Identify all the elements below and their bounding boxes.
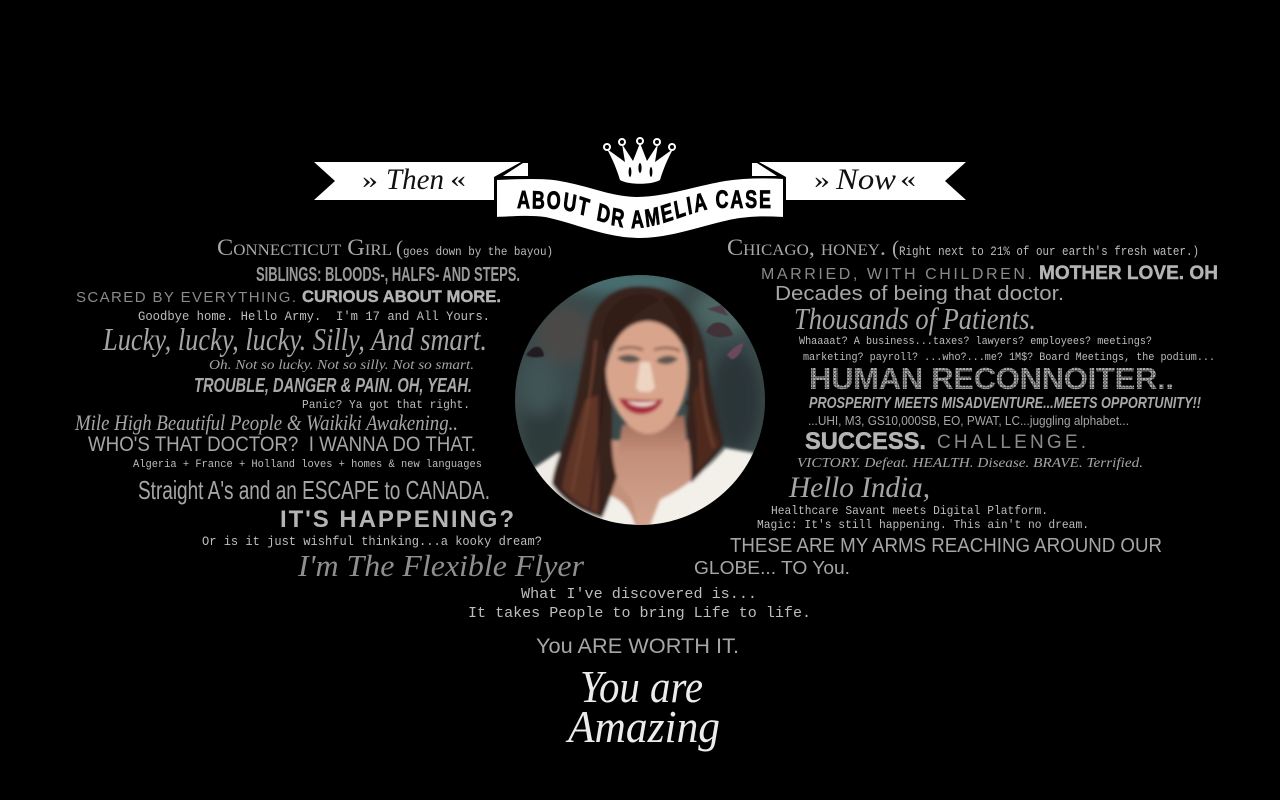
- portrait photo: [515, 270, 765, 530]
- line: These are my arms: THESE ARE MY ARMS REACHING AROUND OUR: [730, 535, 1162, 557]
- icon: crown: [604, 138, 675, 184]
- line: Victory Defeat: VICTORY. Defeat. HEALTH. Disease. BRAVE. Terrified.: [797, 456, 1143, 471]
- line: Panic: Panic? Ya got that right.: [302, 398, 470, 412]
- line: Hello India: Hello India,: [788, 471, 930, 504]
- line: Mile High: Mile High Beautiful People & Waikiki Awakening..: [74, 410, 458, 435]
- banner: Now ribbon: «: [900, 167, 916, 193]
- line: Chicago honey: Chicago, honey.: [727, 235, 886, 260]
- line: Scared by everything: SCARED BY EVERYTHING.: [76, 289, 296, 306]
- banner: Then ribbon: «: [450, 167, 466, 193]
- panel: Then column: [74, 235, 585, 583]
- leaves: [706, 323, 733, 337]
- skin base under shirt: [608, 437, 694, 525]
- line: Scared by everything: [76, 287, 501, 306]
- line: Married with children: [761, 263, 1218, 284]
- line: Or is it just: Or is it just wishful thinking...a kooky dream?: [202, 535, 542, 549]
- line: Straight A's: Straight A's and an ESCAPE to CANADA.: [138, 475, 490, 505]
- line: Chicago honey: Right next to 21% of our earth's fresh water.): [899, 244, 1199, 259]
- line: Goodbye home: Goodbye home. Hello Army. I'm 17 and All Yours.: [138, 310, 490, 324]
- line: Magic: Magic: It's still happening. This ain't no dream.: [757, 518, 1089, 532]
- nose highlight: [636, 362, 655, 392]
- line: Chicago honey: [727, 235, 1199, 260]
- line: Globe to You: GLOBE... TO You.: [694, 558, 850, 578]
- line: Decades: Decades of being that doctor.: [775, 283, 1064, 305]
- line: Connecticut Girl: [217, 235, 553, 260]
- header: ribbon banner with crown: [314, 137, 966, 238]
- line: Algeria France Holland: Algeria + France + Holland loves + homes & new languages: [133, 459, 482, 471]
- line: Lucky lucky lucky: Lucky, lucky, lucky. Silly, And smart.: [102, 321, 487, 357]
- line: Healthcare Savant: Healthcare Savant meets Digital Platform.: [771, 504, 1048, 518]
- line: Oh not so lucky: Oh. Not so lucky. Not so silly. Not so smart.: [209, 358, 474, 373]
- line: What I've discovered: What I've discovered is...: [521, 586, 757, 603]
- line: Connecticut Girl: Connecticut Girl: [217, 235, 392, 260]
- panel: closing message: [468, 586, 811, 752]
- line: Human Reconnoiter: HUMAN RECONNOITER..: [809, 361, 1174, 396]
- line: You are worth it: You ARE WORTH IT.: [536, 635, 739, 658]
- line: Siblings: SIBLINGS: BLOODS-, HALFS- AND STEPS.: [256, 264, 520, 286]
- shirt: [534, 449, 604, 520]
- line: Married with children: MOTHER LOVE. OH: [1039, 263, 1218, 284]
- banner: Then ribbon: [314, 162, 528, 200]
- banner: Then ribbon: Then: [386, 163, 444, 196]
- eyes and brows: [617, 355, 641, 363]
- neck and chest: [614, 415, 690, 526]
- line: Scared by everything: CURIOUS ABOUT MORE.: [302, 287, 501, 306]
- line: Success Challenge: SUCCESS.: [805, 428, 926, 455]
- line: Whaaaat: Whaaaat? A business...taxes? lawyers? employees? meetings?: [799, 336, 1152, 348]
- line: Amazing: Amazing: [565, 701, 720, 752]
- mouth: [619, 398, 663, 414]
- banner: Now ribbon: [752, 162, 966, 200]
- line: Success Challenge: CHALLENGE.: [937, 432, 1086, 453]
- hair back: [552, 287, 724, 518]
- line: Success Challenge: [805, 428, 1086, 455]
- line: Connecticut Girl: (: [396, 236, 403, 260]
- banner: Now ribbon: »: [814, 168, 830, 194]
- line: Marketing payroll: marketing? payroll? ...who?...me? 1M$? Board Meetings, the podium...: [803, 352, 1215, 364]
- line: Chicago honey: (: [892, 236, 899, 260]
- line: Trouble danger pain: TROUBLE, DANGER & PAIN. OH, YEAH.: [194, 375, 472, 397]
- face: [606, 321, 688, 434]
- line: Connecticut Girl: goes down by the bayou): [403, 245, 553, 259]
- line: Married with children: MARRIED, WITH CHILDREN.: [761, 266, 1032, 283]
- line: Who's that doctor: WHO'S THAT DOCTOR? I WANNA DO THAT.: [88, 433, 476, 456]
- line: It takes People: It takes People to bring Life to life.: [468, 605, 811, 622]
- line: UHI alphabet: ...UHI, M3, GS10,000SB, EO, PWAT, LC...juggling alphabet...: [808, 413, 1129, 428]
- line: Thousands of Patients: Thousands of Patients.: [794, 301, 1036, 336]
- banner: Now ribbon: Now: [835, 163, 896, 196]
- panel: Now column: [694, 235, 1218, 578]
- hair strands: [572, 340, 714, 508]
- line: Flexible Flyer: I'm The Flexible Flyer: [297, 548, 585, 583]
- line: It's happening: IT'S HAPPENING?: [280, 506, 514, 533]
- banner: Then ribbon: »: [362, 168, 378, 194]
- fringe sweeping from parting: [602, 294, 660, 355]
- line: You are: You are: [580, 661, 703, 712]
- banner: About Dr Amelia Case wave: ABOUT DR AMELIA CASE: [517, 190, 771, 229]
- earring: [684, 400, 690, 406]
